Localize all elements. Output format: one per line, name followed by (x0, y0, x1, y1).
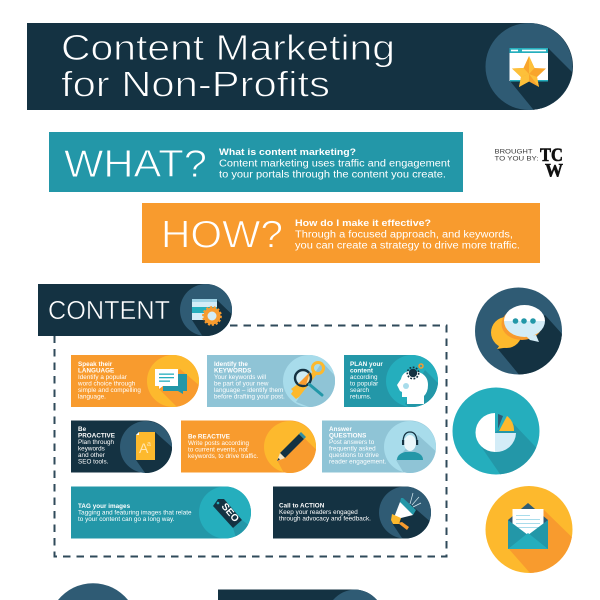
text block: what is content marketing: Content marketing uses traffic and engagement (219, 158, 450, 170)
panel: how (142, 203, 540, 263)
card text: keywords (78, 446, 105, 452)
card text: PROACTIVE (78, 432, 115, 440)
text block: how do I make it effective: How do I make it effective? (295, 218, 431, 229)
card text: word choice through (77, 380, 136, 388)
icon: chat bubbles circle (475, 288, 562, 374)
card text: keywords, to drive traffic. (188, 453, 259, 460)
card text: Be (78, 426, 87, 433)
card text: LANGUAGE (78, 368, 114, 374)
card text: SEO tools. (78, 458, 109, 466)
card text: Tagging and featuring images that relate (78, 510, 192, 516)
card text: through advocacy and feedback. (279, 516, 371, 522)
card text: Plan through (78, 439, 115, 446)
card: speak their language (71, 355, 199, 407)
title: for Non-Profits (61, 64, 330, 104)
card text: search (350, 387, 370, 394)
credit: brought to you by TCW: TO YOU BY: (494, 156, 539, 162)
icon: speech bubbles (147, 355, 199, 407)
panel: what (49, 132, 463, 192)
card text: Your keywords will (214, 374, 266, 381)
icon: headset agent (384, 421, 436, 473)
credit: brought to you by TCW (494, 145, 563, 182)
text block: how do I make it effective: Through a focused approach, and keywords, (295, 230, 513, 240)
icon: browser window with star (486, 23, 572, 110)
card: answer questions (322, 420, 436, 473)
text block: what is content marketing: What is content marketing? (219, 147, 356, 158)
heading: HOW?: HOW? (161, 214, 283, 256)
card text: Call to ACTION (279, 502, 325, 510)
card text: Post answers to (329, 439, 375, 446)
icon: envelope circle (486, 486, 572, 573)
card: be reactive (181, 420, 316, 473)
title (61, 27, 395, 104)
icon: SEO price tag: SEO (219, 501, 241, 525)
heading: CONTENT: CONTENT (48, 295, 170, 325)
text block: what is content marketing: to your portals through the content you create. (219, 170, 446, 180)
card: plan your content (344, 355, 438, 407)
card text: KEYWORDS (214, 368, 251, 374)
title banner (27, 23, 573, 110)
card text: Answer (329, 426, 352, 433)
card text: and other (78, 452, 105, 459)
card text: Identify the (214, 361, 248, 368)
card text: frequently asked (329, 446, 376, 452)
section header: content (38, 284, 232, 336)
card text: simple and compelling (78, 387, 141, 394)
icon: key and magnifier (283, 355, 335, 407)
card: identify the keywords (207, 355, 335, 407)
text block: what is content marketing (219, 147, 450, 180)
credit: brought to you by TCW: BROUGHT (494, 148, 533, 156)
card text: according (350, 374, 378, 381)
card text: Keep your readers engaged (279, 509, 358, 516)
icon: pencil (264, 421, 316, 473)
text block: how do I make it effective: you can create a strategy to drive more traffic. (295, 240, 520, 252)
card: tag your images (71, 486, 251, 538)
icon: browser with gear (180, 284, 232, 336)
card text: reader engagement. (329, 458, 386, 466)
icon: SEO price tag (199, 486, 251, 538)
icon: document with letters (120, 421, 172, 473)
card text: Speak their (78, 361, 113, 368)
icon: document with letters: a (147, 441, 151, 448)
icon: head with gears (386, 355, 438, 407)
icon: document with letters: A (139, 440, 149, 456)
card text: language – identify them (214, 387, 283, 394)
card text: questions to drive (329, 452, 379, 459)
card: be proactive (71, 420, 172, 473)
partial banner at bottom (218, 590, 377, 600)
card text: returns. (350, 394, 372, 400)
icon: megaphone (379, 486, 431, 538)
card text: to popular (350, 380, 378, 388)
card text: content (350, 368, 374, 374)
card text: PLAN your (350, 361, 383, 368)
card text: to current events, not (188, 446, 248, 454)
credit: brought to you by TCW: TC (540, 145, 563, 166)
card text: be part of your new (214, 380, 269, 388)
card text: QUESTIONS (329, 432, 366, 440)
card text: TAG your images (78, 503, 131, 510)
partial circle at bottom (58, 583, 128, 600)
card text: language. (78, 394, 106, 400)
credit: brought to you by TCW: W (545, 160, 563, 182)
card text: Identify a popular (78, 374, 127, 381)
icon: pie chart circle (452, 388, 540, 474)
card text: Be REACTIVE (188, 434, 230, 440)
title: Content Marketing (61, 27, 395, 68)
card text: to your content can go a long way. (78, 516, 175, 523)
card text: before drafting your post. (214, 394, 285, 400)
text block: how do I make it effective (295, 218, 520, 252)
card: call to action (273, 486, 431, 538)
heading: WHAT?: WHAT? (64, 143, 207, 186)
card text: Write posts according (188, 440, 250, 447)
